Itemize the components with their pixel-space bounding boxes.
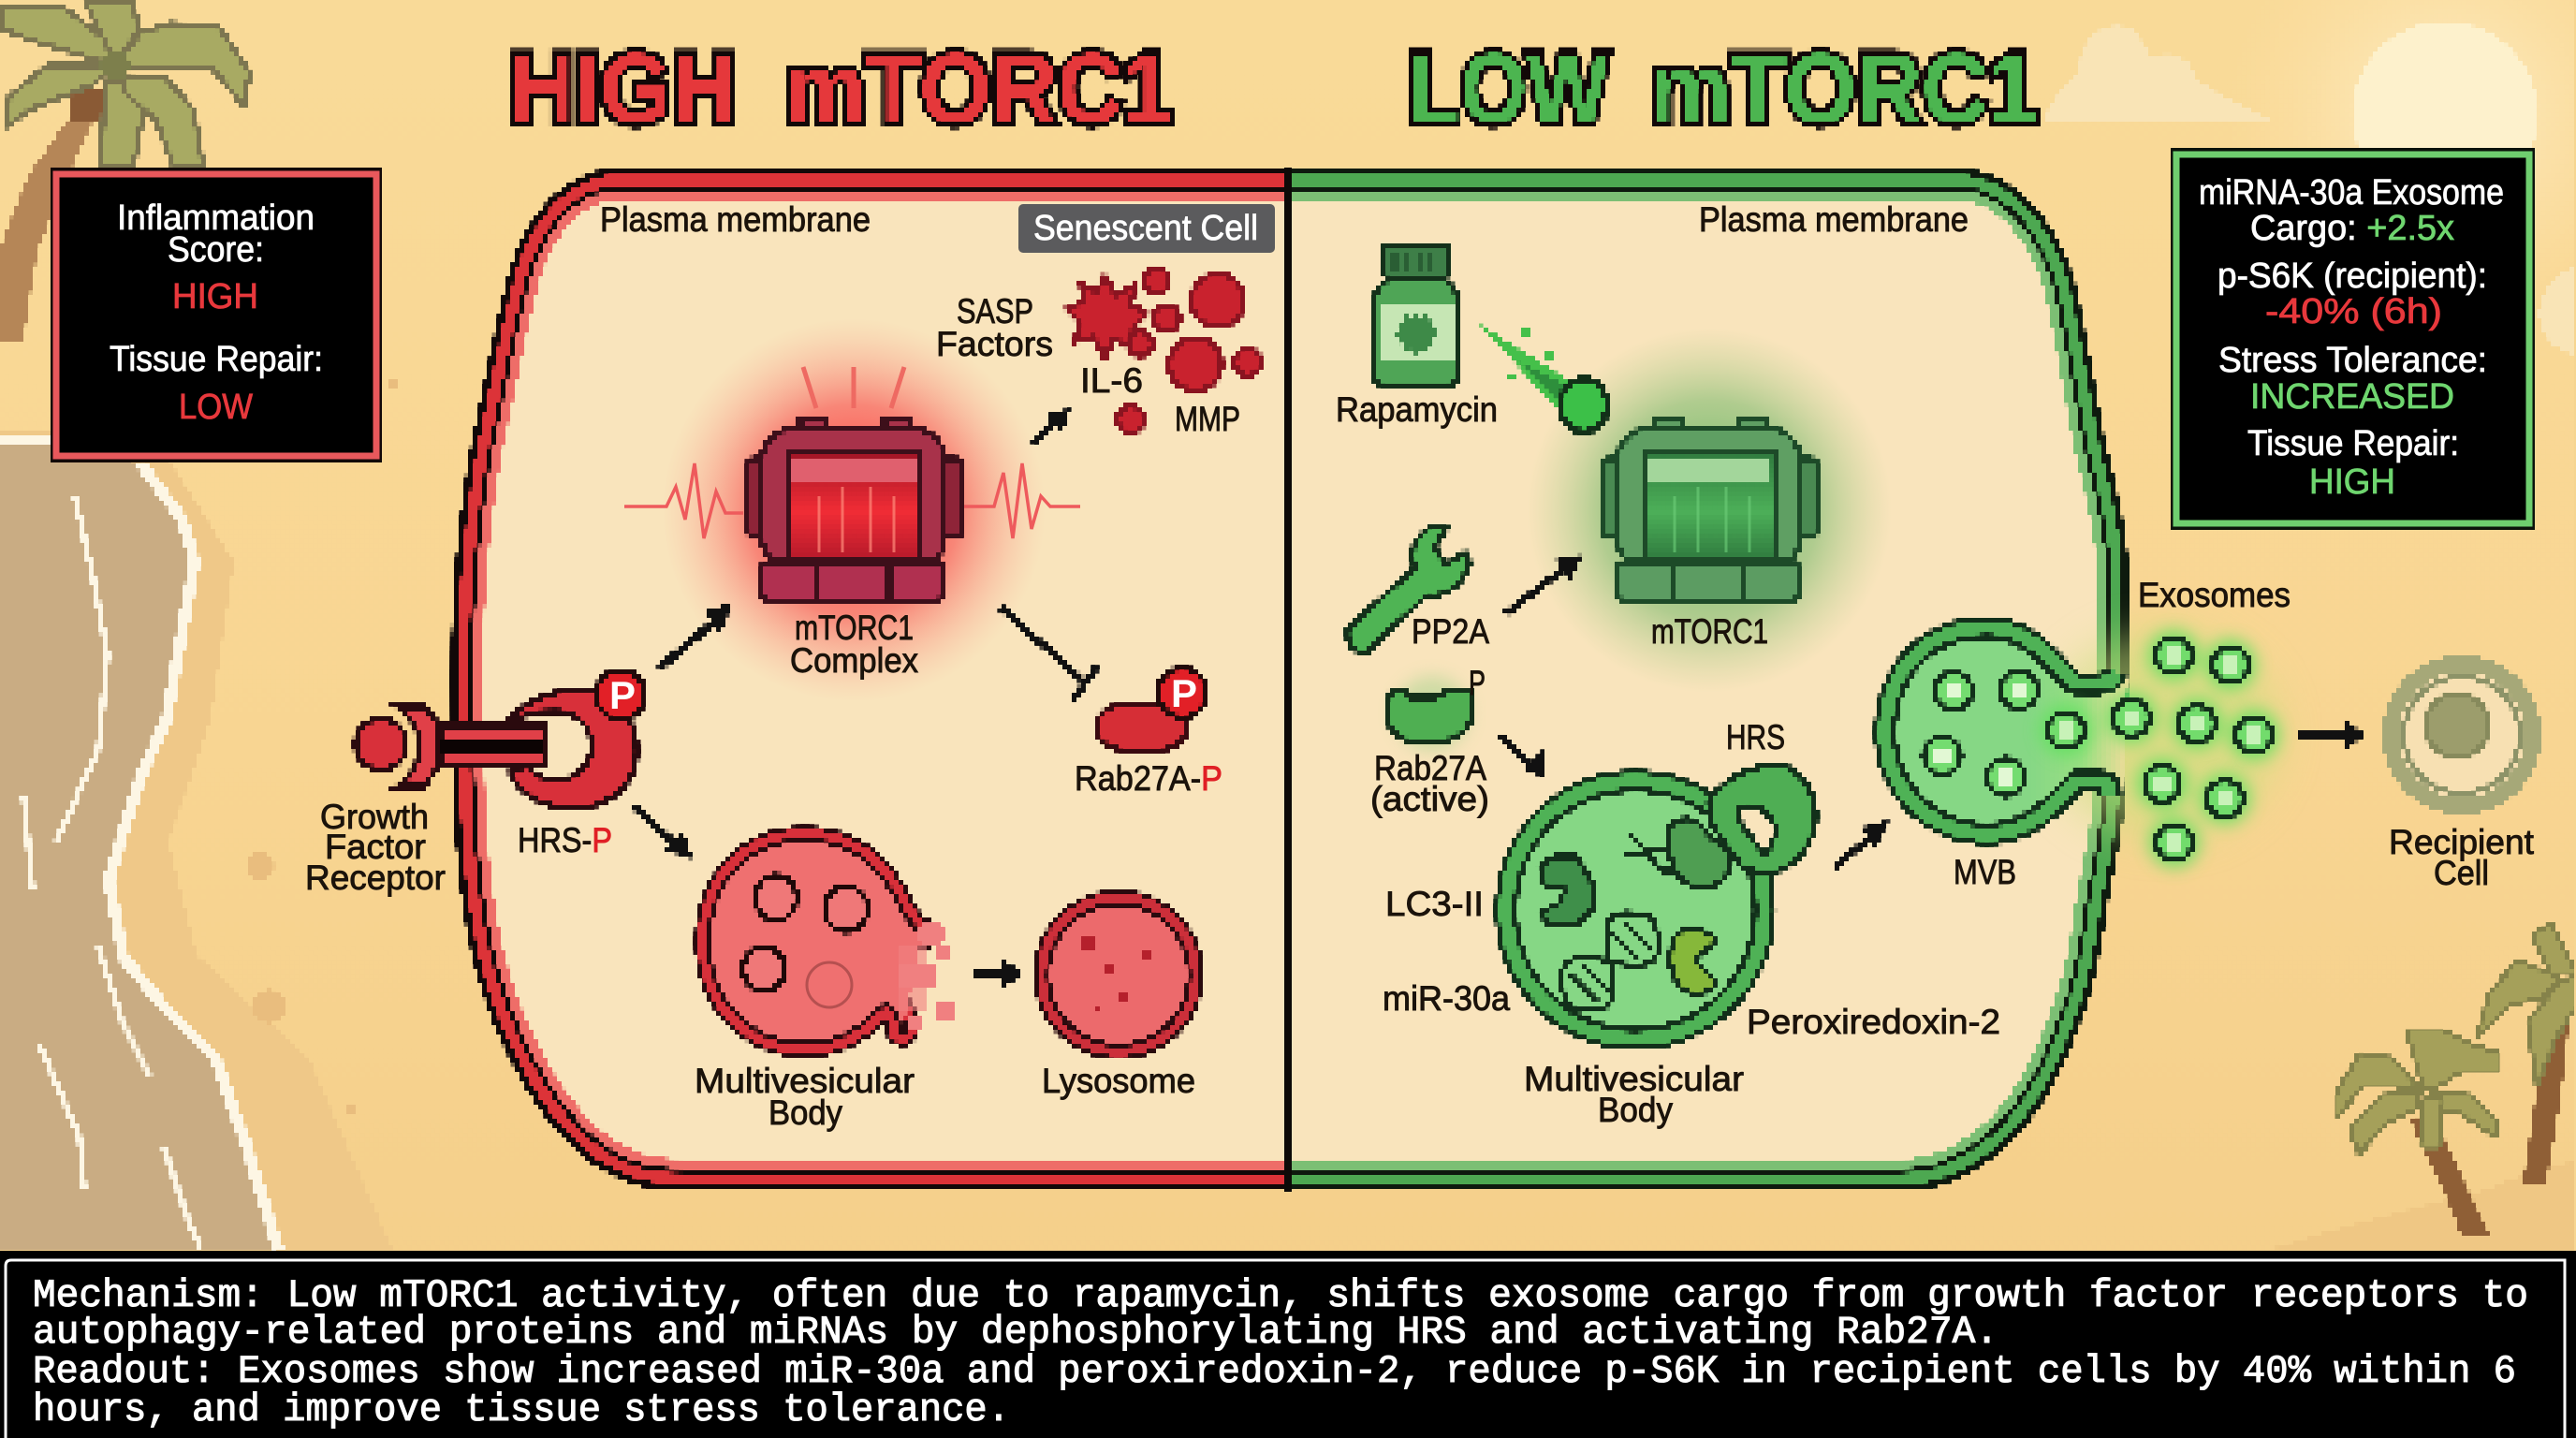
title: high mTORC1: HIGH (508, 34, 738, 144)
title: low mTORC1 (1408, 34, 2039, 144)
label: HRS-P: HRS-P (518, 821, 612, 859)
label: growth factor receptor: Receptor (305, 858, 446, 897)
title: high mTORC1: mTORC1 (784, 34, 1174, 144)
text: readout (33, 1349, 2516, 1432)
exosome field glow (2045, 632, 2279, 838)
label: inflammation score: Inflammation (117, 198, 315, 238)
icon: MVB releasing exosomes (1897, 639, 2128, 822)
icon: mTORC1 complex red (624, 367, 1080, 601)
label: inflammation score (117, 198, 315, 270)
label: tissue repair high: HIGH (2309, 462, 2395, 502)
badge letter: P on Rab27A: P (1171, 671, 1197, 715)
icon: mTORC1 complex green (1603, 419, 1817, 601)
arrow: multivesicular body to MVB (1835, 820, 1889, 868)
label: growth factor receptor: Growth (320, 798, 429, 836)
glow behind mTORC1 (1527, 328, 1892, 693)
LC3-II protein (1540, 857, 1593, 925)
foam line (0, 440, 279, 1251)
label: senescent cell: Senescent Cell (1033, 209, 1258, 248)
text: readout: hours, and improve tissue stress tolerance. (33, 1387, 1010, 1432)
label: rapamycin: Rapamycin (1336, 390, 1498, 429)
label: p-S6K (2217, 257, 2487, 331)
palm tree top left (0, 0, 250, 342)
arrow: HRS to multivesicular body (634, 806, 693, 859)
wet sand (0, 431, 393, 1251)
label: plasma membrane right: Plasma membrane (1699, 200, 1969, 239)
palm trees bottom right (2265, 922, 2576, 1251)
label: recipient cell: Recipient (2389, 823, 2535, 861)
panel: inflammation and repair readout (51, 168, 382, 462)
panel: high mTORC1 senescent cell (305, 199, 1288, 1159)
label: multivesicular body right (1524, 1060, 1744, 1129)
label: PP2A: PP2A (1412, 612, 1489, 651)
label: growth factor receptor: Factor (325, 828, 426, 866)
clouds (2043, 25, 2576, 356)
value: low: LOW (179, 388, 253, 427)
label: MVB: MVB (1954, 853, 2016, 891)
label: multivesicular body right: Multivesicular (1524, 1060, 1744, 1098)
label: lysosome: Lysosome (1042, 1062, 1195, 1100)
arrow: HRS to mTORC1 (659, 602, 733, 668)
label: Rab27A active: Rab27A (1374, 749, 1486, 787)
icon: rapamycin bottle (1374, 245, 1458, 385)
label: tissue repair: Tissue Repair: (110, 340, 323, 379)
text: readout: Readout: Exosomes show increased miR-30a and peroxiredoxin-2, reduce p-S6K in recipient cells by 40% within 6 (33, 1349, 2516, 1394)
label: HRS: HRS (1726, 718, 1785, 756)
label: exosomes: Exosomes (2138, 576, 2291, 614)
membrane right (1288, 199, 2097, 1159)
arrow: to SASP (1033, 408, 1070, 444)
arrow: inhibition of Rab27A (1001, 608, 1097, 700)
icon: multivesicular body red (711, 843, 953, 1041)
icon: exosomes (2040, 630, 2279, 868)
icon: recipient cell (2391, 664, 2533, 806)
icon: lysosome (1050, 906, 1187, 1043)
icon: rapamycin pill comet (1477, 323, 1607, 432)
label: p-S6K: -40% (6h) (2265, 292, 2442, 331)
arrow: PP2A to mTORC1 (1505, 554, 1584, 614)
text: mechanism: Mechanism: Low mTORC1 activity, often due to rapamycin, shifts exosome cargo from growth factor receptors to (33, 1273, 2528, 1318)
icon: growth factor receptor and HRS-P (356, 670, 645, 808)
label: multivesicular body left: Multivesicular (695, 1062, 915, 1100)
title: low mTORC1: mTORC1 (1649, 34, 2039, 144)
sand speckles (246, 379, 396, 1116)
label: miRNA-30a cargo: Cargo: +2.5x (2250, 209, 2454, 248)
bound protein (1623, 819, 1732, 888)
label: recipient cell (2389, 823, 2535, 892)
peroxiredoxin pacman (1670, 930, 1718, 993)
icon: PP2A wrench (1348, 526, 1470, 652)
label: tissue repair high (2247, 424, 2459, 502)
label: peroxiredoxin-2: Peroxiredoxin-2 (1747, 1003, 2000, 1041)
label: stress tolerance: INCREASED (2250, 377, 2454, 417)
label: multivesicular body right: Body (1598, 1091, 1673, 1129)
icon: SASP factors (1067, 269, 1261, 433)
title: low mTORC1: LOW (1408, 34, 1608, 144)
arrow: Rab27A to multivesicular body (1500, 735, 1546, 778)
label: stress tolerance: Stress Tolerance: (2218, 341, 2487, 380)
text: mechanism (33, 1273, 2528, 1355)
label: multivesicular body left (695, 1062, 915, 1132)
icon: Rab27A-P (1096, 668, 1207, 751)
label: mTORC1 complex (790, 609, 918, 680)
ghost vesicle (807, 962, 852, 1007)
label: stress tolerance (2218, 341, 2487, 417)
label: recipient cell: Cell (2434, 854, 2489, 892)
sun (2230, 0, 2576, 330)
text: mechanism: autophagy-related proteins and miRNAs by dephosphorylating HRS and activating Rab27A. (33, 1310, 1998, 1355)
label: SASP factors: SASP (957, 292, 1033, 330)
label: plasma membrane left: Plasma membrane (600, 200, 871, 239)
label: mTORC1: mTORC1 (1651, 612, 1768, 651)
label: inflammation score: Score: (168, 230, 264, 270)
panel: mechanism caption (0, 1251, 2576, 1438)
membrane left (483, 199, 1288, 1159)
sea water (0, 440, 281, 1251)
label: SASP factors (936, 292, 1053, 363)
label: multivesicular body left: Body (768, 1093, 842, 1132)
value: high: HIGH (172, 277, 258, 316)
icon: multivesicular body green (1518, 765, 1816, 1027)
label: miRNA-30a cargo (2199, 173, 2504, 248)
label: mTORC1 complex: mTORC1 (795, 609, 914, 647)
label: miR-30a: miR-30a (1383, 979, 1510, 1018)
label: p-S6K: p-S6K (recipient): (2217, 257, 2487, 296)
vesicles inside MVB (1924, 671, 2038, 796)
label: MMP: MMP (1175, 400, 1240, 438)
center divider (1284, 168, 1292, 1192)
panel: exosome outcome readout (2171, 148, 2535, 530)
label: Rab27A active (1370, 749, 1489, 818)
label: P: P (1469, 664, 1486, 702)
label: mTORC1 complex: Complex (790, 641, 918, 680)
title: high mTORC1 (508, 34, 1174, 144)
badge letter: P on HRS: P (609, 673, 636, 717)
HRS lobe (1708, 765, 1816, 873)
icon: Rab27A active (1387, 676, 1471, 751)
label: growth factor receptor (305, 798, 446, 897)
label: Rab27A active: (active) (1370, 780, 1489, 818)
arrow: to recipient cell (2298, 717, 2364, 753)
panel: low mTORC1 cell (1288, 199, 2535, 1159)
label: SASP factors: Factors (936, 325, 1053, 363)
glow behind mTORC1 complex (662, 318, 1046, 702)
label: IL-6: IL-6 (1080, 361, 1143, 400)
label: tissue repair high: Tissue Repair: (2247, 424, 2459, 463)
arrow: to lysosome (973, 959, 1022, 989)
miR-30a strand (1546, 898, 1674, 1025)
label: miRNA-30a cargo: miRNA-30a Exosome (2199, 173, 2504, 213)
label: LC3-II: LC3-II (1385, 885, 1484, 923)
label: Rab27A-P: Rab27A-P (1075, 759, 1222, 798)
